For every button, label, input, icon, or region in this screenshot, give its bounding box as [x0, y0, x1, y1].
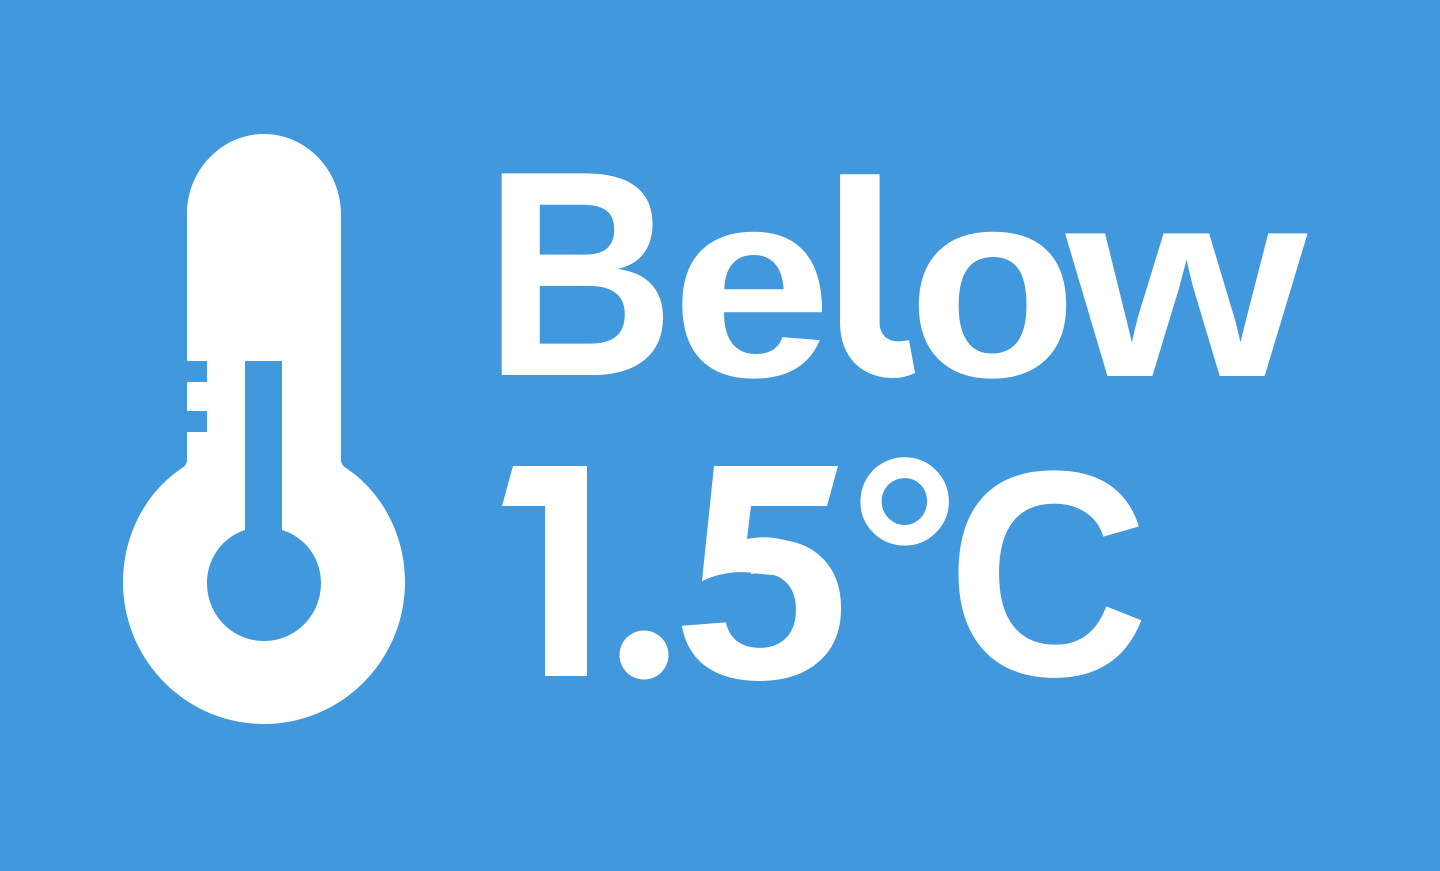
heading: Below	[484, 111, 1308, 438]
heading: 1.5°C	[490, 397, 1149, 743]
heading: Below: o	[908, 133, 1077, 433]
heading: 1.5°C: °	[848, 397, 961, 718]
heading: 1.5°C: 1	[490, 403, 620, 739]
heading: Below: B	[484, 111, 675, 438]
heading: 1.5°C: C	[947, 411, 1149, 738]
heading: Below: e	[671, 133, 832, 433]
heading: 1.5°C: 5	[672, 404, 850, 743]
icon: thermometer	[123, 134, 405, 724]
heading: 1.5°C: .	[612, 470, 676, 718]
heading: Below: w	[1061, 133, 1308, 434]
heading: Below: l	[820, 124, 900, 434]
